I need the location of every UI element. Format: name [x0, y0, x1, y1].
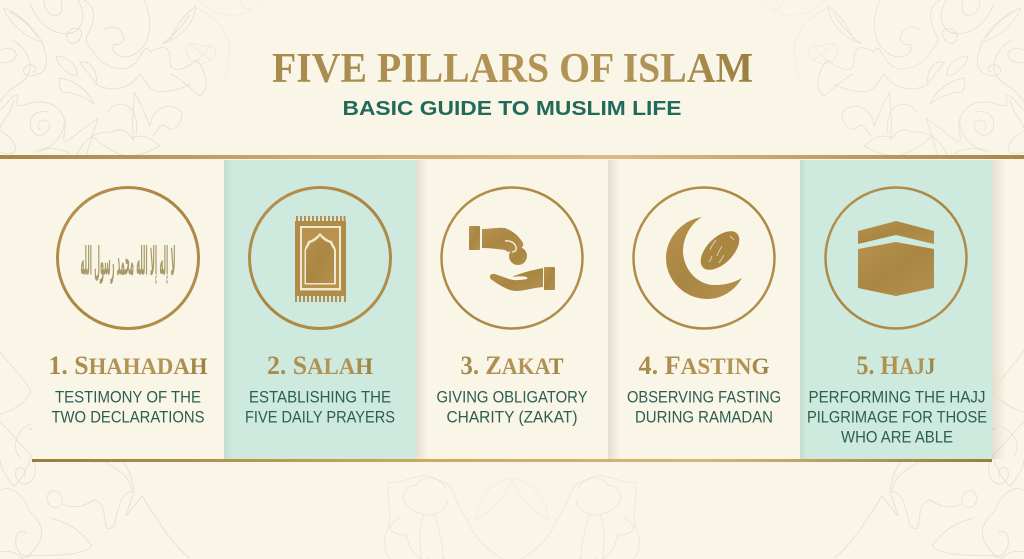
description: Zakat: GIVING OBLIGATORY — [436, 388, 588, 406]
panel: 1 Shahadah — [32, 160, 224, 459]
description: Salah: FIVE DAILY PRAYERS — [245, 408, 395, 426]
ornament: bottom right corner — [834, 422, 1024, 559]
panel: 2 Salah — [224, 160, 428, 459]
description: Salah: ESTABLISHING THE — [249, 388, 391, 406]
description: Fasting: DURING RAMADAN — [635, 408, 773, 426]
description: Hajj: PERFORMING THE HAJJ — [808, 388, 986, 406]
heading: title: FIVE PILLARS OF ISLAM — [272, 46, 753, 92]
soft shadow right of pillars — [992, 160, 1006, 459]
label: 3. Zakat: 3. ZAKAT — [460, 351, 564, 380]
divider: bottom gold line — [32, 459, 992, 462]
divider: top gold line — [0, 155, 1024, 159]
ornament: bottom centre right — [512, 476, 640, 559]
ornament: right edge beside panels — [993, 350, 1024, 456]
label: 1. Shahadah: 1. SHAHADAH — [48, 351, 208, 380]
icon: prayer rug — [250, 188, 390, 328]
label: 2. Salah: 2. SALAH — [267, 351, 373, 380]
panel: 4 Fasting — [608, 160, 781, 459]
icon: Shahadah calligraphy — [58, 188, 198, 328]
heading: subtitle: BASIC GUIDE TO MUSLIM LIFE — [342, 98, 682, 120]
description: Shahadah: TESTIMONY OF THE — [55, 388, 201, 406]
description: Hajj: WHO ARE ABLE — [841, 428, 953, 446]
ornament: left edge beside panels — [0, 352, 31, 458]
description: Hajj: PILGRIMAGE FOR THOSE — [807, 408, 987, 426]
description: Shahadah: TWO DECLARATIONS — [52, 408, 204, 426]
label: 4. Fasting: 4. FASTING — [638, 351, 770, 380]
ornament: bottom left corner — [0, 422, 190, 559]
ornament: top left corner — [0, 0, 262, 156]
icon: crescent moon and date — [634, 188, 774, 328]
icon: Kaaba — [826, 188, 966, 328]
panel: 5 Hajj — [800, 160, 992, 459]
ornament: bottom centre left — [384, 476, 512, 559]
ornament: top right corner — [762, 0, 1024, 156]
icon: Shahadah calligraphy: لا إله إلا الله محمد رسول الله — [81, 239, 176, 285]
label: 5. Hajj: 5. HAJJ — [856, 351, 936, 380]
description: Zakat: CHARITY (ZAKAT) — [446, 408, 578, 426]
description: Fasting: OBSERVING FASTING — [627, 388, 781, 406]
icon: giving hands and coin — [442, 188, 582, 328]
panel: 3 Zakat — [436, 188, 588, 426]
